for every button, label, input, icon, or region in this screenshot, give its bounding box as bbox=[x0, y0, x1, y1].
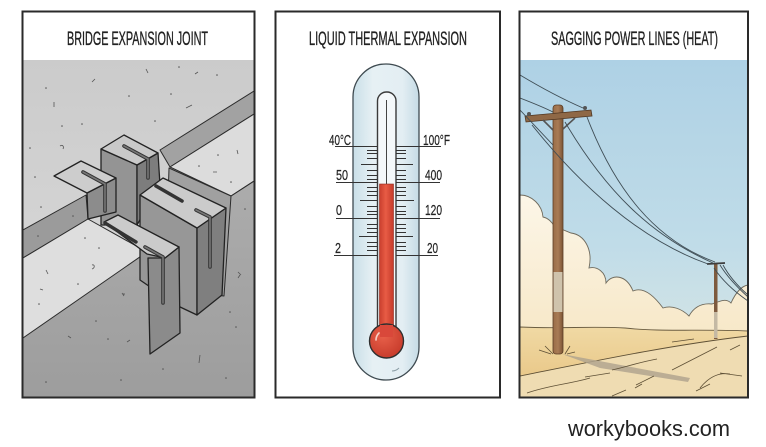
road bbox=[520, 336, 748, 397]
centre block bbox=[101, 149, 137, 225]
icon: thermometer bbox=[334, 64, 441, 380]
footer: site name: workybooks.com bbox=[567, 416, 730, 441]
heading: bridge expansion joint: BRIDGE EXPANSION JOINT bbox=[67, 29, 208, 50]
scale labels left bbox=[329, 132, 351, 257]
concrete speckles bbox=[40, 69, 241, 363]
heading: liquid thermal expansion: LIQUID THERMAL EXPANSION bbox=[309, 29, 467, 50]
panel: sagging power lines bbox=[520, 12, 748, 398]
near pole bbox=[525, 105, 592, 354]
scale labels right: 100°F bbox=[423, 132, 450, 149]
ground bbox=[520, 326, 747, 376]
scale labels left: 2 bbox=[335, 240, 341, 257]
dust clouds bbox=[520, 195, 748, 335]
red liquid column and bulb bbox=[370, 184, 404, 358]
panel: bridge expansion joint bbox=[22, 12, 254, 398]
sagging wires bbox=[520, 75, 748, 301]
scale labels left: 40°C bbox=[329, 132, 351, 149]
scale ticks bbox=[334, 146, 441, 256]
left plate bbox=[87, 178, 116, 219]
road cracks bbox=[527, 339, 742, 396]
scale labels left: 50 bbox=[336, 167, 348, 184]
panel: liquid thermal expansion bbox=[276, 12, 500, 398]
scale labels right bbox=[423, 132, 450, 257]
front plate bbox=[148, 247, 180, 354]
illustration: desert road with power lines bbox=[520, 60, 748, 397]
scale labels right: 400 bbox=[425, 167, 442, 184]
scale labels right: 20 bbox=[427, 240, 438, 257]
scale labels left: 0 bbox=[336, 202, 342, 219]
pole shadow bbox=[562, 354, 690, 382]
far pole bbox=[707, 263, 725, 339]
illustration: concrete joint bbox=[23, 60, 254, 397]
right block bbox=[140, 195, 197, 315]
scale labels right: 120 bbox=[425, 202, 442, 219]
